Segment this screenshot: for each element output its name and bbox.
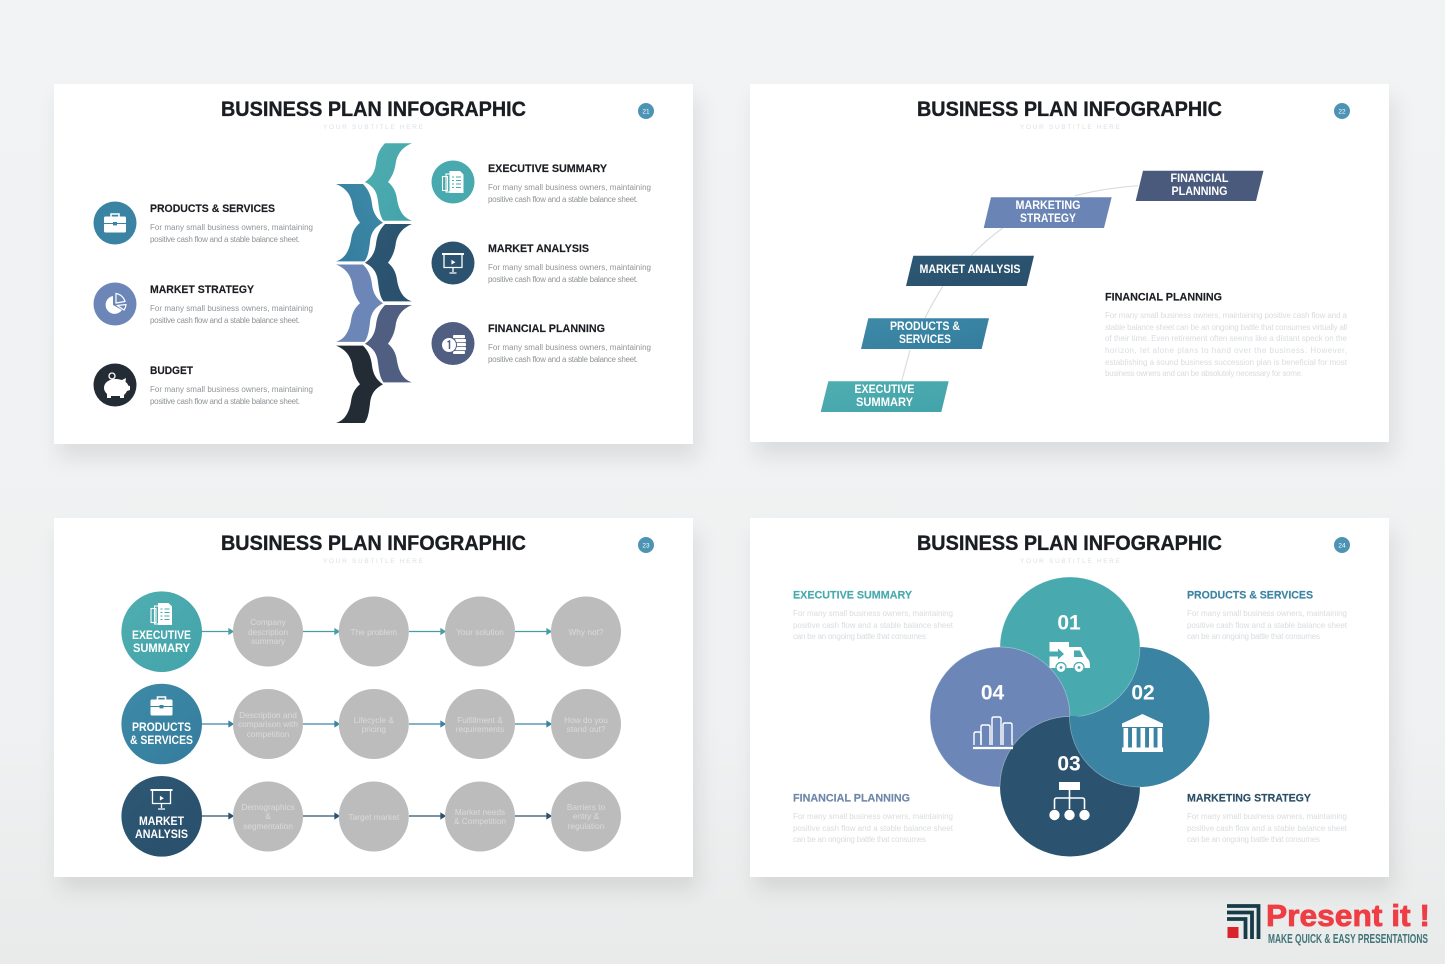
text: marketing strategy: positive cash flow and a stable balance sheet — [1187, 824, 1348, 833]
logo: Present it — [1227, 898, 1430, 946]
step: executive summary: SUMMARY — [856, 397, 913, 409]
subtitle: YOUR SUBTITLE HERE — [323, 558, 424, 565]
grey step circles row 3: & Competition — [454, 816, 506, 826]
item: budget — [94, 364, 313, 406]
text: executive summary — [793, 590, 954, 641]
item: products and services — [94, 202, 313, 244]
grey step circles row 2: competition — [247, 729, 290, 739]
panel: slide 23, process rows — [54, 518, 693, 877]
logo: Present it: Present it ! — [1266, 898, 1430, 933]
node: executive summary: EXECUTIVE — [132, 630, 191, 642]
item: budget: For many small business owners, maintaining — [150, 385, 313, 394]
icon: bar chart — [973, 717, 1013, 748]
page number: 22 — [1338, 108, 1346, 115]
item: executive summary — [432, 160, 651, 204]
item: budget: positive cash flow and a stable balance sheet. — [150, 397, 300, 406]
step: market analysis — [906, 256, 1034, 286]
panel: slide 24, overlapping circles — [750, 518, 1389, 877]
item: executive summary: positive cash flow and a stable balance sheet. — [488, 195, 638, 204]
text: products and services: For many small business owners, maintaining — [1187, 609, 1347, 618]
page number — [1334, 537, 1350, 553]
text: financial planning: positive cash flow and a stable balance sheet — [793, 824, 954, 833]
icon: org chart — [1049, 782, 1090, 820]
text: financial planning: can be an ongoing battle that consumes — [793, 835, 926, 844]
icon: delivery truck — [1050, 642, 1090, 672]
grey step circles row 3: regulation — [568, 821, 605, 831]
grey step circles row 1: summary — [251, 636, 286, 646]
item: financial planning — [432, 322, 651, 365]
grey step circles row 2: stand out? — [567, 724, 606, 734]
text: financial planning: For many small business owners, maintaining — [793, 812, 953, 821]
grey step circles row 3: Market needs — [455, 807, 505, 817]
item: market strategy: positive cash flow and a stable balance sheet. — [150, 316, 300, 325]
page number — [1334, 103, 1350, 119]
text: marketing strategy: MARKETING STRATEGY — [1187, 792, 1312, 804]
step: financial planning: FINANCIAL — [1170, 173, 1228, 185]
step: products and services: PRODUCTS & — [890, 321, 960, 333]
step: marketing strategy: MARKETING — [1016, 200, 1081, 212]
text: financial planning: FINANCIAL PLANNING — [793, 792, 910, 804]
icon: bank — [1122, 714, 1163, 752]
panel: slide 22, staircase — [750, 84, 1389, 442]
text: executive summary: For many small business owners, maintaining — [793, 609, 953, 618]
step: financial planning: PLANNING — [1172, 186, 1228, 198]
grey step circles row 3 — [233, 782, 621, 852]
page number — [638, 103, 654, 119]
node: executive summary — [121, 591, 202, 672]
grey step circles row 3: & — [265, 811, 271, 821]
page number: 21 — [642, 108, 650, 115]
text block: financial planning: For many small business owners, maintaining positive cash flow and a — [1105, 311, 1348, 320]
node: executive summary: SUMMARY — [133, 643, 190, 655]
item: products and services: PRODUCTS & SERVICES — [150, 203, 275, 215]
icon: logo mark — [1227, 906, 1258, 939]
icon: piggy bank — [104, 373, 130, 398]
grey step circles row 1: Company — [250, 617, 287, 627]
node: products and services — [121, 684, 202, 764]
wave arrow chart — [336, 143, 412, 423]
item: financial planning: FINANCIAL PLANNING — [488, 323, 605, 335]
text block: financial planning: business owners and can be absolutely necessary for some. — [1105, 369, 1303, 378]
page number: 24 — [1338, 542, 1346, 549]
text: marketing strategy: For many small business owners, maintaining — [1187, 812, 1347, 821]
number 01: 01 — [1057, 612, 1081, 634]
node: products and services: PRODUCTS — [132, 722, 191, 734]
title: BUSINESS PLAN INFOGRAPHIC — [221, 97, 526, 121]
step: executive summary: EXECUTIVE — [854, 384, 915, 396]
item: market analysis: MARKET ANALYSIS — [488, 243, 589, 255]
grey step circles row 2: requirements — [456, 724, 504, 734]
item: products and services: For many small business owners, maintaining — [150, 223, 313, 232]
grey step circles row 3: Target market — [348, 812, 400, 822]
subtitle: YOUR SUBTITLE HERE — [323, 124, 424, 131]
text block: financial planning: establishing a sound business succession plan is beneficial for most — [1105, 358, 1348, 367]
text: executive summary: can be an ongoing battle that consumes — [793, 632, 926, 641]
title: BUSINESS PLAN INFOGRAPHIC — [917, 531, 1222, 555]
step: products and services: SERVICES — [899, 334, 951, 346]
item: financial planning: positive cash flow and a stable balance sheet. — [488, 355, 638, 364]
text: financial planning — [793, 792, 954, 844]
subtitle: YOUR SUBTITLE HERE — [1020, 558, 1121, 565]
connector curve — [902, 186, 1138, 381]
grey step circles row 2: comparison with — [238, 719, 298, 729]
grey step circles row 2: Lifecycle & — [354, 715, 394, 725]
grey step circles row 2: Description and — [239, 710, 297, 720]
item: market strategy: MARKET STRATEGY — [150, 284, 255, 296]
text block: financial planning: FINANCIAL PLANNING — [1105, 292, 1222, 304]
number 03: 03 — [1057, 752, 1081, 776]
grey step circles row 3: Demographics — [241, 802, 295, 812]
node: products and services: & SERVICES — [130, 735, 193, 747]
text: products and services: positive cash flow and a stable balance sheet — [1187, 621, 1348, 630]
item: products and services: positive cash flow and a stable balance sheet. — [150, 235, 300, 244]
item: market analysis: positive cash flow and a stable balance sheet. — [488, 275, 638, 284]
page number — [638, 537, 654, 553]
text block: financial planning — [1105, 292, 1348, 378]
row 2 arrows — [202, 722, 551, 726]
grey step circles row 2: Fulfillment & — [457, 715, 503, 725]
grey step circles row 1 — [233, 596, 621, 666]
grey step circles row 1: Why not? — [568, 627, 604, 637]
row 1 arrows — [202, 629, 551, 634]
grey step circles row 2: pricing — [362, 724, 386, 734]
text: executive summary: EXECUTIVE SUMMARY — [793, 590, 913, 602]
text: products and services — [1187, 590, 1348, 641]
panel: slide 21, wave arrows — [54, 84, 693, 444]
row 3 arrows — [202, 814, 551, 818]
item: financial planning: For many small business owners, maintaining — [488, 343, 651, 352]
step: financial planning — [1136, 171, 1264, 201]
icon: pie chart — [106, 294, 126, 314]
grey step circles row 3: segmentation — [243, 821, 293, 831]
item: executive summary: EXECUTIVE SUMMARY — [488, 163, 608, 175]
step: marketing strategy — [984, 197, 1112, 228]
grey step circles row 1: The problem — [351, 627, 397, 637]
title: BUSINESS PLAN INFOGRAPHIC — [917, 97, 1222, 121]
grey step circles row 2 — [233, 689, 621, 759]
title: BUSINESS PLAN INFOGRAPHIC — [221, 531, 526, 555]
step: products and services — [861, 318, 989, 349]
grey step circles row 2: How do you — [564, 715, 608, 725]
venn circles — [930, 577, 1210, 856]
number 04: 04 — [981, 682, 1004, 704]
text: executive summary: positive cash flow and a stable balance sheet — [793, 621, 954, 630]
grey step circles row 3: entry & — [573, 811, 600, 821]
number 02: 02 — [1131, 682, 1155, 704]
text: marketing strategy: can be an ongoing battle that consumes — [1187, 835, 1320, 844]
page number: 23 — [642, 542, 650, 549]
node: market analysis: MARKET — [139, 816, 184, 828]
text block: financial planning: stable balance sheet can be an ongoing battle that consumes virtually all — [1105, 323, 1347, 332]
icon: coins — [442, 335, 466, 354]
grey step circles row 1: Your solution — [456, 627, 504, 637]
item: budget: BUDGET — [150, 365, 193, 377]
item: market strategy: For many small business owners, maintaining — [150, 304, 313, 313]
text block: financial planning: of their time. Even retirement often seems like a distant speck on the — [1105, 334, 1348, 343]
subtitle: YOUR SUBTITLE HERE — [1020, 124, 1121, 131]
item: market analysis: For many small business owners, maintaining — [488, 263, 651, 272]
grey step circles row 3: Barriers to — [567, 802, 606, 812]
step: executive summary — [821, 381, 949, 412]
item: executive summary: For many small business owners, maintaining — [488, 183, 651, 192]
grey step circles row 1: description — [248, 627, 288, 637]
node: market analysis: ANALYSIS — [135, 829, 188, 841]
step: market analysis: MARKET ANALYSIS — [920, 264, 1021, 276]
text: products and services: PRODUCTS & SERVICES — [1187, 590, 1313, 602]
item: market analysis — [432, 242, 651, 284]
item: market strategy — [94, 282, 313, 326]
step: marketing strategy: STRATEGY — [1020, 213, 1076, 225]
node: market analysis — [121, 776, 202, 857]
text: products and services: can be an ongoing battle that consumes — [1187, 632, 1320, 641]
text: marketing strategy — [1187, 792, 1348, 844]
text block: financial planning: horizon, let alone plans to hand over the business. However, — [1105, 346, 1347, 355]
